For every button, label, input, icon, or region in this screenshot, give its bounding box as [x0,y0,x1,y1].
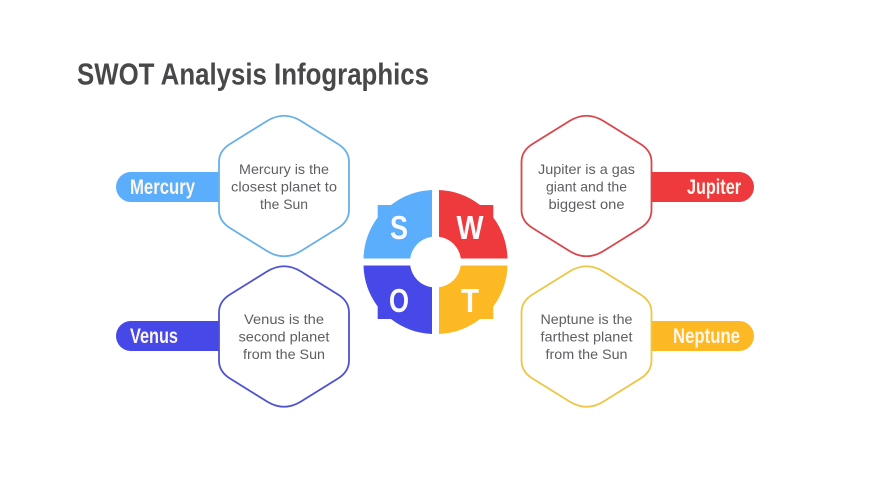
text: Venus description: Venus is the [244,311,324,327]
text: Jupiter description: giant and the [546,178,627,194]
text: Jupiter description: biggest one [548,196,625,212]
text: Mercury description: the Sun [260,196,308,212]
letter O: O [389,282,409,319]
text: Mercury description [231,161,337,212]
letter T: T [461,282,479,319]
label text: Neptune: Neptune [673,325,740,348]
letter W: W [456,209,484,246]
card: Neptune [522,266,754,407]
text: Venus description: second planet [238,328,330,344]
label pill: Venus [116,321,225,351]
label text: Jupiter: Jupiter [687,176,741,199]
text: Jupiter description [538,161,635,212]
SWOT wheel [364,190,508,334]
card: Venus [116,266,349,407]
label text: Mercury: Mercury [130,176,195,199]
segment: T [439,266,508,334]
label pill: Jupiter [645,172,754,202]
text: Venus description [238,311,330,362]
text: Neptune description: from the Sun [546,346,628,362]
hexagon: Mercury [219,116,349,256]
label pill: Mercury [116,172,225,202]
text: Neptune description: farthest planet [540,328,633,344]
hexagon: Jupiter [522,116,652,256]
label text: Venus: Venus [130,325,178,348]
title: SWOT Analysis Infographics [77,56,429,92]
text: Neptune description: Neptune is the [540,311,633,327]
segment: O [364,266,432,334]
text: Jupiter description: Jupiter is a gas [538,161,635,177]
letter S: S [390,209,408,246]
label pill: Neptune [645,321,754,351]
card: Mercury [116,116,349,256]
segment: W [439,190,508,258]
segment: S [364,190,432,258]
card: Jupiter [522,116,754,256]
hexagon: Venus [219,266,349,407]
text: Mercury description: Mercury is the [239,161,329,177]
text: Neptune description [540,311,633,362]
hexagon: Neptune [522,266,652,407]
text: Venus description: from the Sun [243,346,325,362]
text: Mercury description: closest planet to [231,178,337,194]
